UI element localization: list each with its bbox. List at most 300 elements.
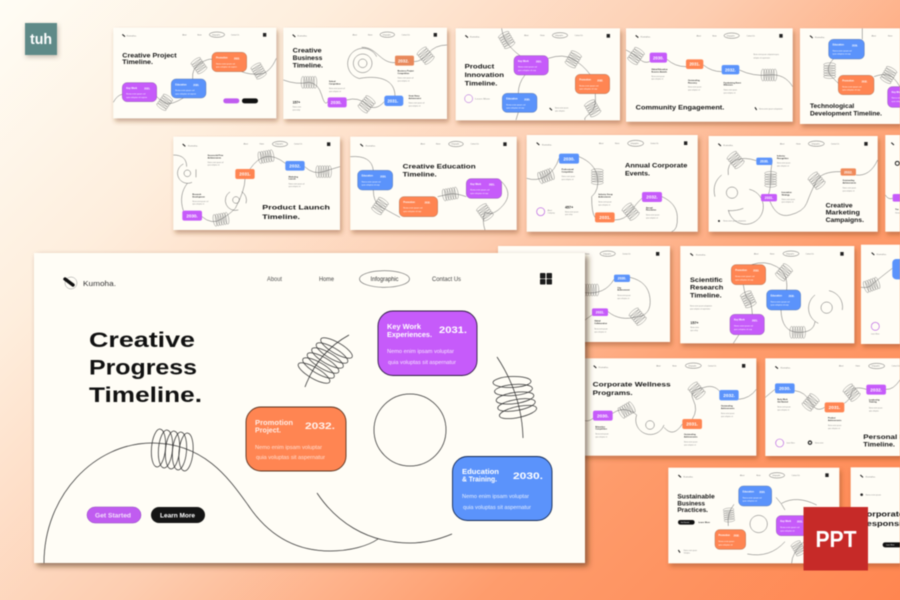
text blocks: Strategy (782, 193, 790, 196)
card: blue: 2030. (618, 277, 626, 281)
fragments: Tea (895, 209, 899, 211)
nav bar (360, 141, 507, 147)
text blocks: quia voluptas sit (329, 90, 341, 93)
text blocks: Resolution (646, 209, 657, 212)
card: orange: 2032. (844, 170, 853, 174)
card: blue: quia voluptas sit asp (362, 184, 381, 187)
heading: Corporate Wellness (593, 381, 671, 388)
fragments: Kumoha. (877, 254, 887, 256)
card: orange: quia voluptas sit asp (579, 88, 598, 91)
nav bar: Home (756, 475, 761, 477)
text blocks: Nemo enim ipsam vol (329, 88, 346, 90)
timeline line (350, 157, 508, 230)
card: blue (285, 161, 305, 171)
heading: Creative Education (403, 164, 476, 171)
nav bar (636, 33, 783, 39)
text blocks (192, 154, 305, 206)
nav bar: About (754, 252, 759, 255)
text blocks: quia voluptas sit (688, 89, 700, 92)
stat: 457+: 457+ (565, 205, 573, 209)
card: blue: quia voluptas sit asp (506, 107, 525, 110)
card: orange (682, 419, 702, 429)
heading: Sustainable (677, 493, 715, 500)
text blocks: Achievement (598, 195, 611, 198)
coil: top center (296, 334, 355, 387)
text blocks: School (329, 81, 336, 83)
card: blue: Nemo enim ipsam vol (175, 90, 195, 92)
card: orange: Promotion (718, 534, 731, 537)
caption (755, 107, 783, 110)
text blocks: Nemo enim ipsam vol (409, 103, 425, 105)
stat: 457+: quia volup (565, 214, 573, 216)
nav bar: Infographic (631, 143, 639, 145)
nav bar: About (656, 364, 661, 367)
title (89, 328, 202, 407)
caption: Voluptas (684, 552, 690, 555)
card: orange (595, 212, 615, 222)
icon badge: Learn More (475, 98, 490, 100)
fragments (861, 253, 900, 336)
nav bar: Kumoha. (781, 368, 791, 370)
card: orange: Nemo enim ipsam vol (842, 86, 862, 88)
nav bar: Infographic (383, 34, 391, 36)
text blocks: quia voluptas sit (617, 297, 630, 300)
nav: Contact Us: Contact Us (432, 277, 461, 283)
timeline line (585, 277, 650, 320)
caption: Nemo enim ipsam (555, 108, 569, 110)
card: purple: 2032. (870, 387, 882, 392)
text blocks: Competition (595, 428, 608, 431)
nav bar (718, 141, 868, 147)
coils (740, 262, 805, 338)
heading (122, 52, 177, 66)
card: purple: quia voluptas sit asp (734, 328, 753, 331)
text blocks (651, 53, 779, 94)
timeline line (173, 155, 340, 222)
card: Education & Training 2030: & Training. (462, 474, 497, 484)
card: blue: Nemo enim ipsam vol (743, 497, 762, 499)
icons: Learn More (786, 443, 795, 445)
nav bar: Home (540, 35, 545, 37)
card: purple: 2031. (536, 62, 542, 64)
card: blue: quia voluptas sit aspern (175, 92, 196, 95)
second curve (317, 493, 452, 543)
card: purple (642, 192, 662, 202)
buttons (678, 520, 711, 525)
card: blue: 2030. (563, 156, 575, 161)
card: blue (502, 93, 537, 112)
card: orange: quia voluptas sit asp (403, 210, 422, 213)
nav bar (465, 33, 610, 38)
nav bar: Kumoha. (188, 145, 199, 147)
card: Key Work Experiences 2031: Key Work (387, 322, 422, 331)
heading: Responsibi (860, 519, 900, 528)
card: Education & Training 2030: Nemo enim ipsam voluptar (462, 494, 529, 500)
text blocks: quia voluptas sit (208, 164, 220, 167)
card: blue: 2030. (759, 492, 766, 494)
nav bar: Contact Us (294, 143, 302, 146)
text blocks: Nemo enim ipsam (617, 295, 631, 297)
heading: Creative (293, 48, 322, 55)
nav bar: Kumoha. (599, 367, 609, 369)
card: purple (122, 83, 157, 102)
card: purple (514, 56, 548, 75)
card: orange: 2032. (734, 536, 740, 538)
card: orange: quia voluptas sit aspern (216, 66, 237, 69)
caption: Nemo enim ipsam (684, 550, 698, 552)
heading (863, 434, 900, 449)
card: blue (775, 383, 795, 393)
card: orange: 2031. (239, 172, 251, 177)
text blocks: voluptas sit aspernatur (753, 56, 770, 59)
card: orange (686, 59, 703, 69)
text blocks (594, 286, 631, 333)
card: purple (593, 411, 613, 421)
text blocks: Nemo enim ipsam (724, 89, 738, 91)
nav bar: About (182, 33, 187, 36)
nav bar: Kumoha. (366, 145, 376, 147)
card: purple (866, 385, 886, 395)
card: Key Work Experiences 2031: Experiences. (387, 330, 432, 339)
card: Promotion Project 2032: 2032. (305, 421, 335, 432)
coils (627, 46, 777, 81)
text blocks: quia voluptas sit (598, 204, 611, 207)
nav bar: Infographic (212, 34, 220, 36)
panel: slide Technological Development Timeline (800, 28, 900, 124)
heading: Practices. (677, 507, 708, 514)
heading (625, 163, 688, 178)
card: orange (841, 168, 856, 176)
heading: Creative Project (122, 52, 177, 59)
nav bar (585, 251, 659, 256)
nav bar: Contact Us (747, 34, 755, 37)
text blocks: Successful Prior (208, 154, 224, 157)
card: Promotion Project 2032: Nemo enim ipsam voluptar (255, 445, 322, 451)
button: Get Started (87, 507, 141, 523)
nav bar: Infographic (872, 366, 880, 368)
heading (262, 204, 330, 221)
heading: Community Engagement. (636, 104, 724, 111)
card: blue (829, 39, 864, 59)
nav bar: Home (260, 144, 264, 146)
card: blue: Education (833, 44, 844, 47)
text blocks: Nemo enim ipsam (651, 76, 665, 78)
card: orange: Nemo enim ipsam vol (403, 208, 423, 210)
text blocks: Research (192, 193, 202, 196)
card: blue: Education (506, 98, 518, 101)
card: Key Work Experiences 2031: 2031. (439, 325, 467, 336)
text blocks: Annual (646, 206, 653, 209)
card: purple: Nemo enim ipsam vol (470, 190, 490, 192)
nav bar: Kumoha. (696, 255, 707, 257)
nav bar (775, 363, 900, 370)
card: blue: 2030. (524, 99, 530, 101)
coils (498, 30, 602, 118)
text blocks: Nemo enim ipsam (688, 87, 702, 89)
card: orange: Nemo enim ipsam vol (579, 85, 599, 87)
nav bar: Kumoha. (470, 36, 481, 38)
card: blue 2031 (384, 96, 403, 106)
card: purple (592, 308, 608, 316)
coils (371, 187, 494, 222)
card: orange (575, 74, 610, 94)
text blocks: quia voluptas sit (777, 408, 790, 411)
text blocks: quia voluptas sit (828, 427, 840, 430)
card: orange: Nemo enim ipsam vol (735, 276, 755, 278)
heading: Timeline. (262, 214, 300, 221)
panel: slide Creative Project Timeline (113, 28, 276, 118)
card: purple: Key Work (126, 88, 138, 90)
text blocks: Nemo enim (293, 106, 302, 108)
text blocks: quia voluptas sit (409, 105, 421, 108)
card: blue (767, 290, 801, 310)
nav bar (537, 140, 687, 146)
icon: brand logo: tuh (30, 31, 52, 48)
text blocks: Nemo enim ipsam (721, 413, 735, 415)
nav: About: About (267, 277, 282, 283)
card: orange: 2032. (597, 80, 603, 82)
nav bar: Contact Us (471, 143, 479, 146)
card: blue: 2032. (725, 67, 736, 72)
card: purple: Key Work (734, 320, 745, 322)
heading: Events. (625, 171, 650, 178)
concentric circles (714, 175, 763, 224)
card: purple (776, 516, 810, 536)
heading: Nemo enim ipsam voluptatem (690, 304, 713, 307)
nav bar: About (839, 365, 844, 368)
card: purple (888, 87, 900, 107)
timeline line (585, 386, 756, 432)
nav bar: Home (436, 144, 440, 146)
card: orange 2032 (395, 56, 414, 66)
text blocks (562, 168, 660, 219)
heading: Research (690, 285, 723, 292)
card: purple: Nemo enim ipsam vol (734, 326, 754, 328)
heading: Timeline. (690, 292, 722, 299)
nav: Infographic pill (360, 271, 410, 287)
timeline line (828, 28, 900, 87)
card: orange: 2031. (829, 405, 840, 410)
text blocks: Outstanding (843, 179, 855, 182)
nav bar: Kumoha. (683, 476, 694, 478)
card: purple: 2030. (597, 413, 609, 418)
text blocks: Recognition (777, 157, 789, 160)
text blocks: Nemo enim ipsam (562, 176, 576, 178)
card: Promotion Project 2032: Promotion (255, 418, 293, 427)
card: purple 2030 (328, 97, 347, 107)
card: Education & Training 2030: quia voluptas sit aspernatur (463, 505, 531, 511)
text blocks: Outstanding (688, 79, 700, 82)
text blocks: Nemo enim ipsam (828, 425, 842, 427)
nav bar: About (353, 33, 358, 36)
text blocks: Nemo enim ipsam (646, 214, 660, 216)
card: blue: 2030. (380, 176, 386, 178)
card: orange: 2031. (689, 62, 700, 67)
panel: slide cropped right, row three (861, 245, 900, 344)
text blocks: Outstanding (721, 405, 733, 408)
heading: Timeline. (293, 62, 323, 69)
caption: Nemo enim ipsam (866, 494, 882, 496)
circle (374, 394, 446, 466)
text blocks: Nemo enim ipsam vol (208, 162, 224, 164)
text blocks: Achievements (684, 435, 698, 438)
text blocks: quia voluptas sit (398, 80, 410, 83)
heading (826, 202, 864, 224)
panel: slide Corporate Responsibility (851, 467, 900, 563)
text blocks: Professional (562, 168, 574, 171)
text blocks: Achievements (843, 181, 857, 184)
stat: 457+: About (548, 209, 553, 212)
card: Education & Training 2030: 2030. (513, 471, 543, 482)
card: orange: 2032. (862, 81, 868, 83)
nav bar: Contact Us (650, 142, 659, 145)
nav bar: Infographic (727, 35, 735, 37)
card: purple: 2031. (752, 320, 758, 322)
panel: slide behind main, row three (498, 246, 670, 342)
coils (824, 63, 898, 85)
card: orange: 2031. (686, 422, 698, 427)
heading: Product (465, 63, 495, 70)
text blocks: Nemo enim ipsam (777, 163, 791, 165)
nav bar: Home (856, 366, 860, 368)
nav bar: About (780, 142, 785, 145)
panel: slide Corporate Wellness Programs (575, 358, 756, 456)
card: purple: 2030. (653, 55, 664, 60)
nav bar: Infographic (555, 35, 563, 37)
card: Education & Training 2030 (452, 456, 552, 520)
nav bar: About (697, 34, 702, 37)
text blocks: Launch (289, 179, 296, 181)
card: blue (722, 65, 739, 74)
card: orange (212, 52, 247, 72)
big curve (44, 443, 378, 563)
nav bar (594, 363, 745, 369)
card: orange: quia voluptas sit asp (735, 278, 754, 281)
card: orange: Promotion (735, 269, 748, 272)
heading (465, 63, 504, 87)
card: orange (838, 75, 874, 95)
nav bar: Kumoha. (641, 37, 651, 39)
card: Key Work Experiences 2031: Nemo enim ipsam voluptar (387, 349, 454, 355)
card: orange: 2032. (753, 271, 759, 273)
card: blue (171, 79, 206, 98)
timeline line (626, 50, 793, 87)
card: purple: Key Work (470, 184, 482, 186)
card: orange: quia voluptas sit (718, 543, 733, 546)
card: orange: Promotion (579, 79, 592, 82)
text blocks: Global Education (651, 68, 668, 71)
coil: right (493, 357, 538, 438)
card: orange: Promotion (216, 57, 228, 60)
text blocks: Nemo enim ipsam (777, 406, 791, 408)
card: Promotion Project 2032: Project. (255, 426, 281, 434)
heading: Campaigns. (826, 217, 864, 224)
text blocks: Leadership (869, 398, 880, 401)
card: blue: Nemo enim ipsam vol (771, 301, 790, 303)
text blocks: Milestone (724, 84, 734, 87)
text blocks: quia voluptas sit (562, 178, 574, 181)
card: orange: quia voluptas sit asp (842, 89, 861, 92)
timeline line (113, 58, 276, 104)
nav bar: Infographic (275, 144, 283, 146)
nav bar (183, 141, 330, 147)
card: orange (235, 169, 255, 179)
card: blue (756, 158, 772, 165)
nav bar: Home (368, 34, 372, 36)
nav bar: Home (672, 365, 677, 367)
card: Education & Training 2030: Education (462, 467, 499, 476)
nav bar: Kumoha. (297, 36, 308, 38)
nav bar: About (421, 143, 426, 146)
card: blue: 2030. (760, 160, 769, 164)
text blocks: quia voluptas sit (843, 189, 855, 192)
timeline line (502, 28, 596, 120)
concentric circles (636, 415, 664, 435)
coils (726, 150, 826, 190)
nav bar (690, 251, 844, 257)
nav bar: Infographic (688, 365, 697, 367)
nav bar: Contact Us (792, 474, 800, 477)
heading (677, 493, 715, 514)
heading (860, 510, 900, 528)
caption (550, 108, 569, 112)
text blocks: Industry Group (598, 193, 613, 196)
heading: Business (293, 55, 323, 62)
caption (678, 550, 698, 555)
nav bar: About (244, 143, 249, 146)
text blocks: Fundraising Event (724, 81, 741, 84)
heading: Creative (826, 202, 853, 209)
heading: Business (677, 500, 705, 507)
coils (212, 149, 331, 227)
text blocks: Global (594, 321, 601, 323)
card: blue: Nemo enim ipsam vol (833, 50, 852, 52)
heading: Innovation (465, 72, 504, 79)
card: blue: 2030. (852, 45, 858, 47)
timeline line (283, 45, 447, 108)
text blocks: quia voluptas sit (594, 330, 607, 333)
card: Key Work Experiences 2031 (378, 311, 477, 376)
text blocks: Nemo enim ipsam (782, 199, 796, 201)
text blocks: Education (595, 425, 606, 428)
text blocks: Recovery (688, 81, 698, 84)
nav bar: Contact Us (892, 365, 900, 368)
nav bar: Home (615, 143, 619, 145)
heading (810, 103, 882, 117)
nav bar: Kumoha. (815, 37, 826, 39)
heading: Timeline. (122, 59, 153, 66)
text blocks: Nemo enim ipsam vol (289, 183, 305, 185)
card: blue (614, 275, 630, 282)
button: Learn More (151, 507, 205, 523)
text blocks: Industry (777, 155, 786, 158)
card: blue: quia voluptas sit asp (833, 53, 852, 56)
button: Learn More (886, 545, 895, 547)
badge: PPT (804, 507, 868, 570)
icon: grid menu (540, 273, 552, 284)
text blocks: quia voluptas sit (782, 201, 794, 204)
coils (537, 168, 640, 221)
title: Creative (89, 328, 195, 352)
panel: slide Personal Timeline (765, 358, 900, 456)
concentric circles (809, 291, 843, 323)
logo (65, 277, 116, 289)
card: purple: Nemo enim ipsam vol (126, 94, 146, 96)
nav: Home: Home (319, 277, 335, 283)
caption (718, 220, 747, 223)
nav bar: About (740, 474, 745, 477)
text blocks: Competition (562, 170, 574, 173)
